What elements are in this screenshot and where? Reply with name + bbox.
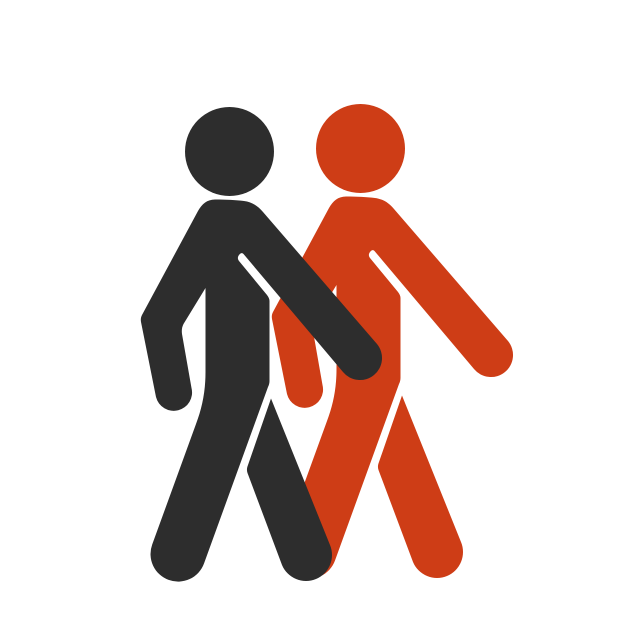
figure: red walker: [272, 104, 513, 579]
figure: black walker: [141, 107, 382, 582]
